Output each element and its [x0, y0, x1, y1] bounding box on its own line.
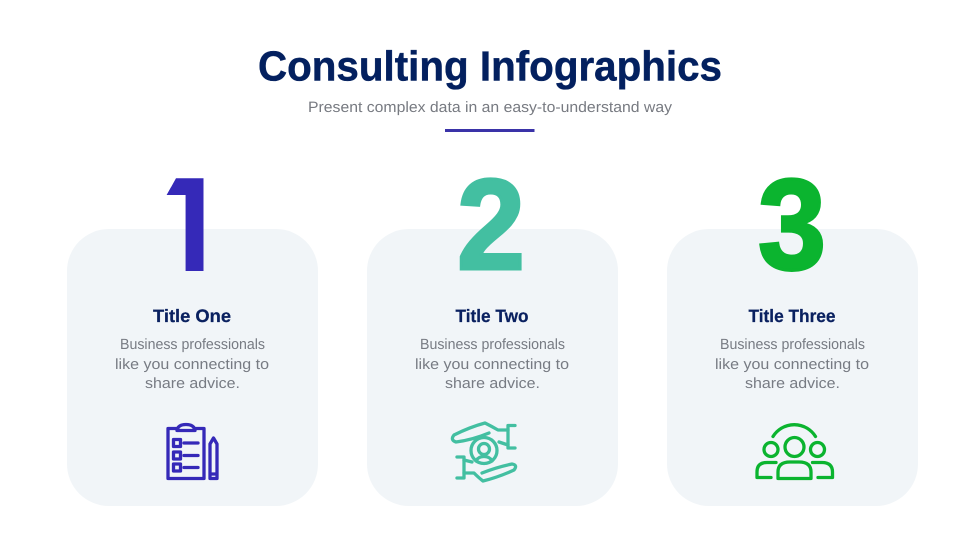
card two text	[415, 337, 569, 392]
card three text: like you connecting to	[715, 357, 869, 373]
card three text: share advice.	[745, 376, 840, 392]
card two text: share advice.	[445, 376, 540, 392]
icon: hands holding person	[452, 423, 516, 481]
card one text: like you connecting to	[115, 357, 269, 373]
icon: clipboard and pencil	[168, 424, 217, 478]
card two text: like you connecting to	[415, 357, 569, 373]
title underline	[445, 129, 534, 132]
number 3: 3	[758, 153, 826, 297]
card two heading: Title Two	[456, 306, 528, 326]
card one text: Business professionals	[120, 337, 265, 353]
card three heading: Title Three	[748, 306, 836, 326]
icon: group of people	[757, 425, 832, 478]
subtitle: Present complex data in an easy-to-understand way	[308, 99, 673, 116]
card one heading: Title One	[153, 306, 231, 326]
card three text: Business professionals	[720, 337, 865, 353]
number 1: 1	[150, 152, 222, 299]
title: Consulting Infographics	[258, 42, 722, 90]
card one text: share advice.	[145, 376, 240, 392]
card one text	[115, 337, 269, 392]
panel: card two	[367, 153, 618, 506]
card two text: Business professionals	[420, 337, 565, 353]
panel: card one	[67, 152, 318, 506]
card three text	[715, 337, 869, 392]
panel: card three	[667, 153, 918, 506]
number 2: 2	[457, 153, 525, 297]
